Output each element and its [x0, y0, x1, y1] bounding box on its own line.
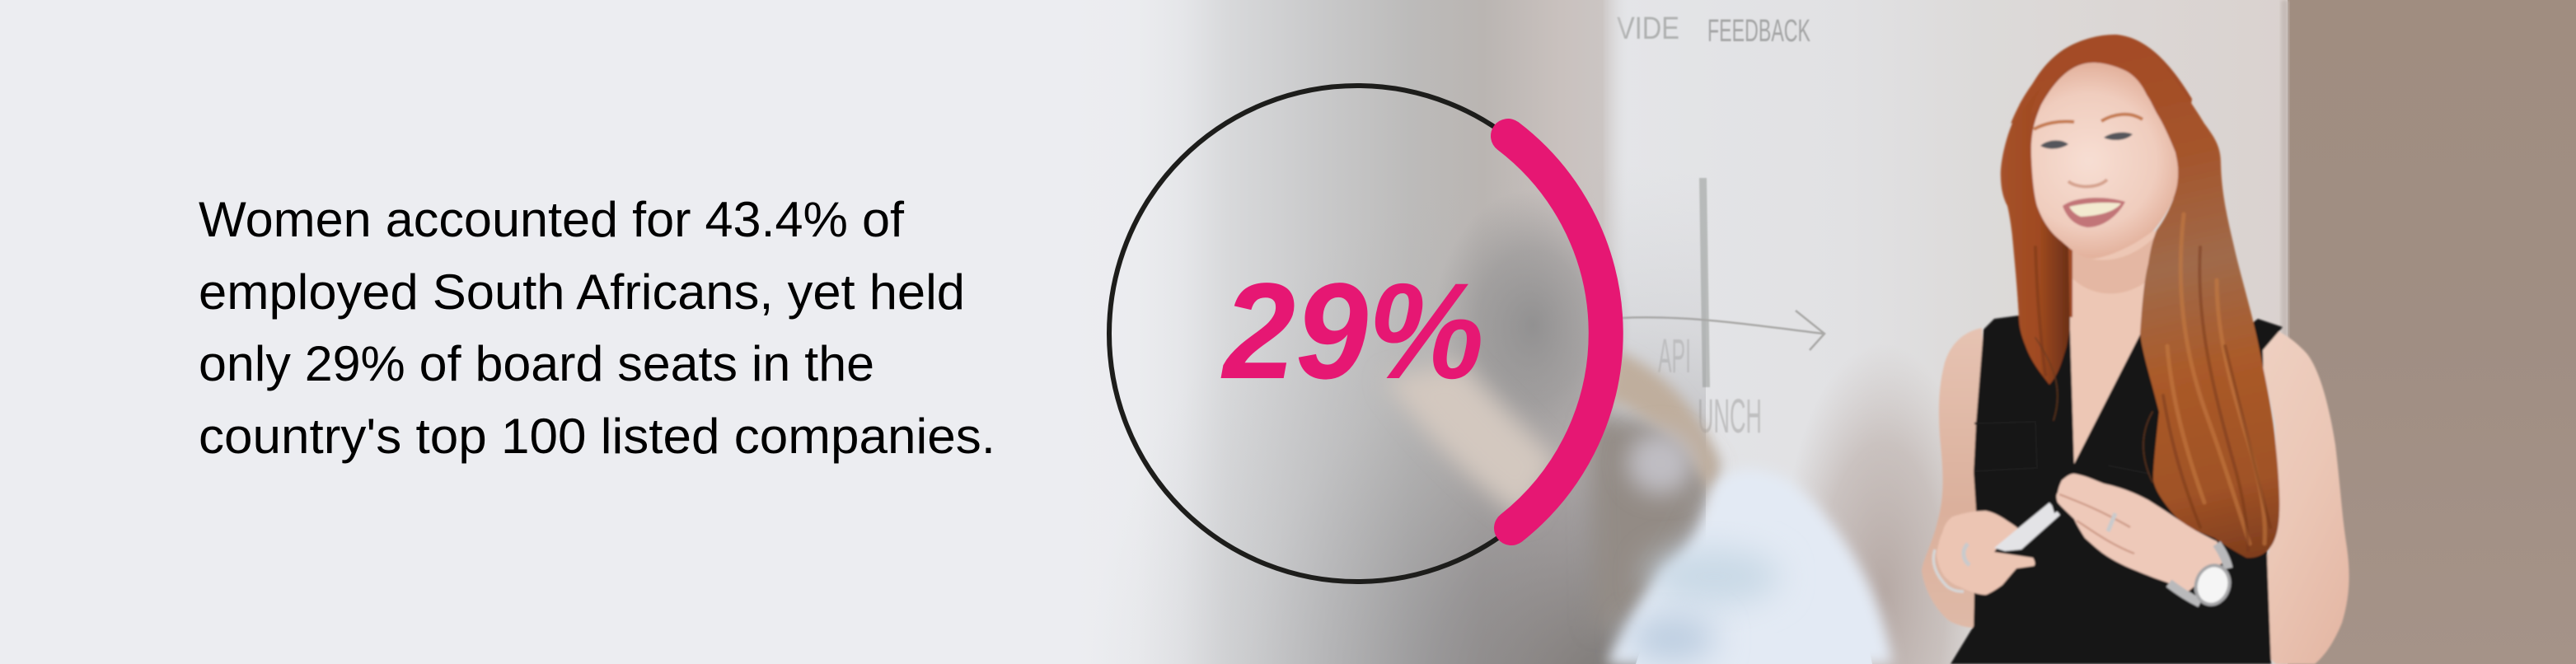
watch face [2191, 561, 2234, 609]
mouth [2063, 198, 2125, 227]
text line 3: only 29% of board seats in the [199, 336, 874, 391]
whiteboard arrow [1621, 311, 1824, 350]
photo background: whiteboard wall and brown wall [1607, 0, 2576, 664]
left arm [1922, 328, 1986, 628]
wall edge shadow [2281, 0, 2288, 664]
woman presenting [1922, 35, 2349, 664]
marker cap [2049, 488, 2066, 513]
whiteboard wall [1607, 0, 2288, 664]
whiteboard writing: API [1658, 330, 1691, 383]
nose [2068, 180, 2107, 186]
black dress [1951, 305, 2283, 664]
blurred foreground person [1071, 0, 1893, 664]
light blob [1628, 432, 1693, 494]
tan neck band [1607, 350, 1718, 494]
whiteboard vertical line [1699, 178, 1710, 387]
right eye [2104, 133, 2133, 140]
neck shadow [2070, 235, 2157, 293]
hair strands [2035, 214, 2270, 550]
wall soft shadow [1788, 206, 1978, 664]
hair: left side [2001, 87, 2070, 385]
gauge arc [1508, 136, 1606, 528]
right hand [2057, 474, 2222, 593]
warm hair strand [1384, 362, 1557, 519]
face [2031, 63, 2178, 259]
left eye [2040, 140, 2068, 149]
loose strands on dress [2035, 338, 2152, 482]
right arm [2192, 326, 2349, 664]
text line 1: Women accounted for 43.4% of [199, 192, 904, 247]
eyebrows [2034, 115, 2143, 129]
taupe shoulder shadow [1590, 419, 1714, 626]
dress pockets [1974, 422, 2149, 474]
dark strands [2035, 247, 2270, 550]
whiteboard writing: UNCH [1698, 390, 1762, 443]
blurred shirt soft edge [1607, 470, 1893, 664]
text line 2: employed South Africans, yet held [199, 264, 965, 320]
shirt lower shading [1630, 615, 1716, 662]
rings [1964, 513, 2115, 565]
shirt body [1636, 491, 1872, 664]
shirt blue shading [1648, 549, 1780, 605]
neck and chest [2070, 231, 2159, 464]
body text [199, 192, 995, 464]
eyes [2040, 133, 2133, 149]
hair: right side [2011, 35, 2279, 558]
hair: back volume [2001, 35, 2192, 317]
donut gauge: 29% [1109, 86, 1606, 582]
watch strap [2169, 544, 2228, 603]
marker [1994, 503, 2060, 551]
left hand [1937, 511, 2035, 595]
text line 4: country's top 100 listed companies. [199, 409, 995, 464]
bottom shading [1071, 165, 1706, 664]
blurred hair [1071, 0, 1628, 664]
whiteboard writing [1617, 12, 1824, 443]
dark hair shadow [1434, 189, 1632, 461]
whiteboard word: feedback: FEEDBACK [1707, 14, 1810, 49]
whiteboard word: vide: VIDE [1617, 12, 1679, 46]
teeth [2069, 203, 2121, 217]
gauge ring [1109, 86, 1605, 582]
bracelet [1933, 549, 1964, 592]
brown wall [2288, 0, 2576, 664]
finger creases [2059, 494, 2134, 554]
light strands [2167, 214, 2265, 544]
gauge value: 29% [1220, 255, 1484, 408]
